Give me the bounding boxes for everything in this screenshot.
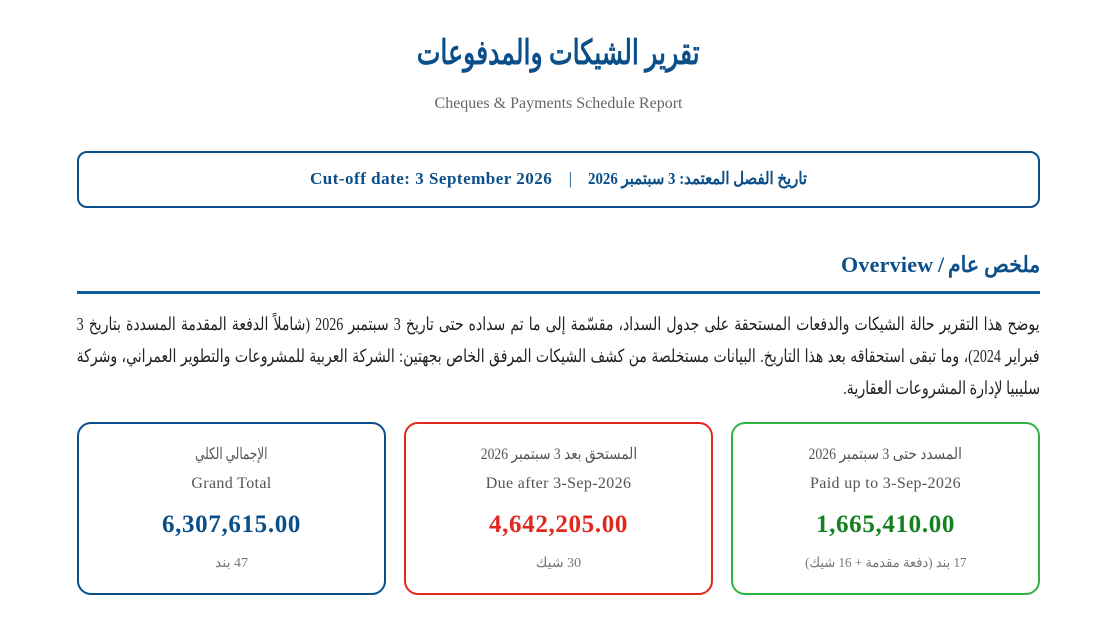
cut-off date banner [77,151,1040,208]
total label arabic: الإجمالي الكلي [195,446,268,463]
due label english: Due after 3-Sep-2026 [486,475,631,492]
card: grand total [77,422,386,595]
due amount: 4,642,205.00 [489,511,628,538]
section heading: overview [841,252,1040,278]
total label english: Grand Total [191,475,272,492]
paid item count: 17 بند (دفعة مقدمة + 16 شيك) [805,556,966,571]
overview paragraph: فبراير 2024)، وما تبقى استحقاقه بعد هذا التاريخ. البيانات مستخلصة من كشف الشيكات المرفق الخاص بجهتين: الشركة العربية للمشروعات والتطوير العمراني، وشركة [77,346,1040,366]
overview paragraph [77,312,1040,398]
heading slash: / [938,252,944,277]
overview paragraph: يوضح هذا التقرير حالة الشيكات والدفعات المستحقة على جدول السداد، مقسّمة إلى ما تم سداده حتى تاريخ 3 سبتمبر 2026 (شاملاً الدفعة المقدمة المسددة بتاريخ 3 [77,314,1040,334]
subtitle: Cheques & Payments Schedule Report [435,95,682,112]
paid amount: 1,665,410.00 [816,511,955,538]
total amount: 6,307,615.00 [162,511,301,538]
section heading rule [77,291,1040,294]
card: paid up to date [731,422,1040,595]
cut-off date arabic: تاريخ الفصل المعتمد: 3 سبتمبر 2026 [588,169,807,188]
card: due after date [404,422,713,595]
overview paragraph: سليبيا لإدارة المشروعات العقارية. [843,378,1040,398]
total item count: 47 بند [215,556,248,571]
heading english: Overview [841,252,933,277]
cut-off date english: Cut-off date: 3 September 2026 [310,169,552,188]
title: تقرير الشيكات والمدفوعات [417,35,700,72]
paid label english: Paid up to 3-Sep-2026 [810,475,961,492]
due item count: 30 شيك [536,556,581,571]
paid label arabic: المسدد حتى 3 سبتمبر 2026 [809,446,962,463]
separator: | [569,169,572,188]
heading arabic: ملخص عام [948,252,1040,277]
due label arabic: المستحق بعد 3 سبتمبر 2026 [480,446,637,463]
